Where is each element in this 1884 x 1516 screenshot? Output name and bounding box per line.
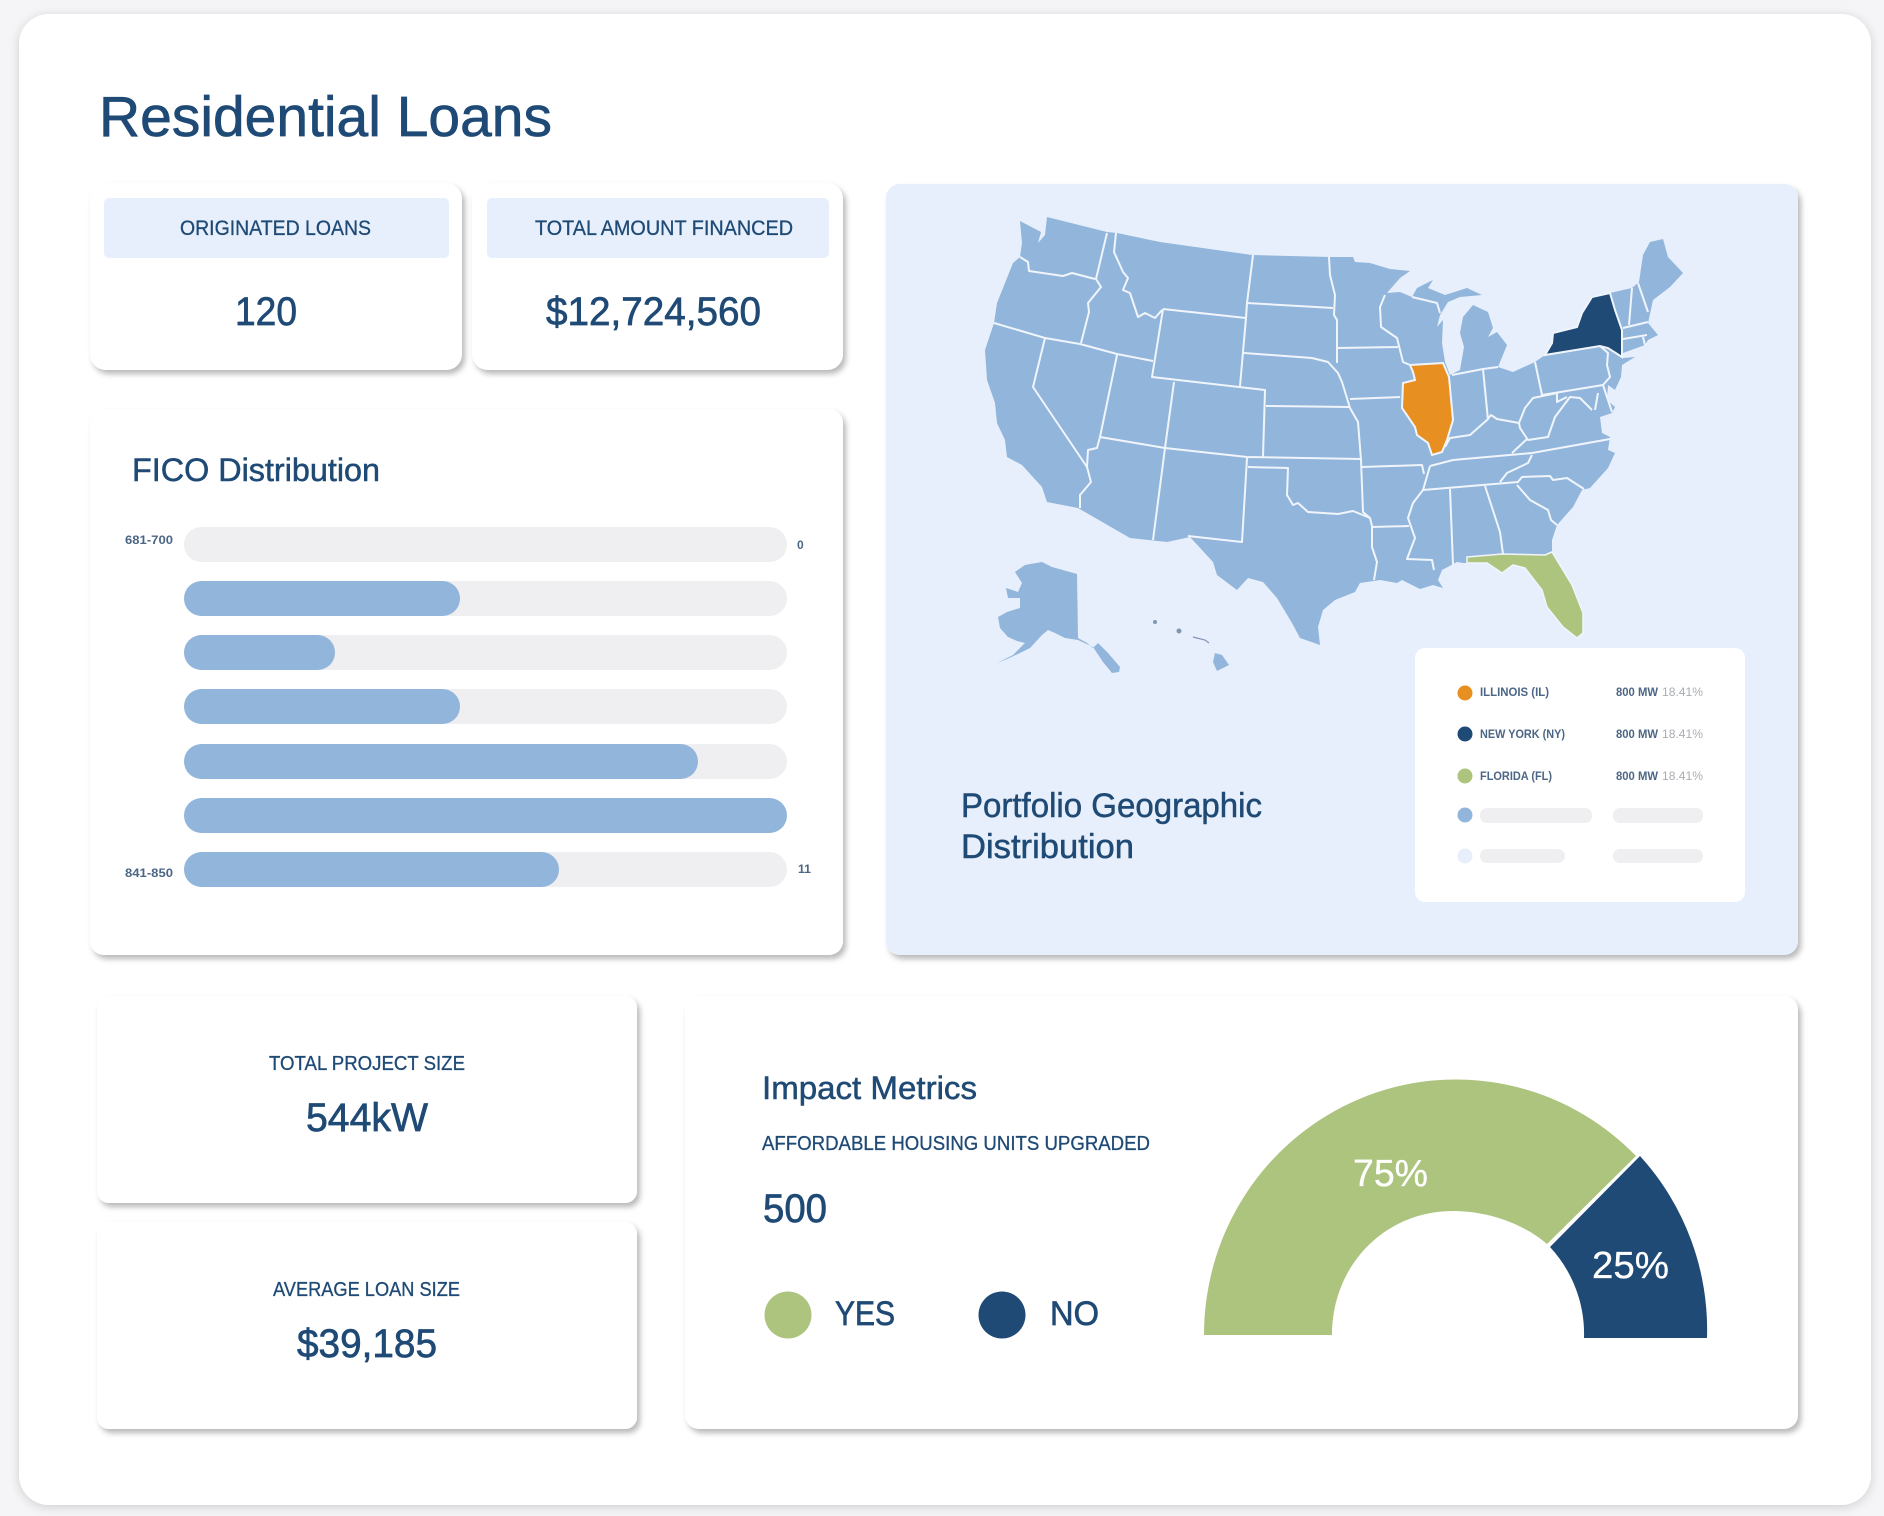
bar chart: 11 (798, 862, 811, 876)
panel: FICO distribution (90, 409, 843, 955)
map legend: 800 MW (1616, 685, 1659, 699)
state: Alaska (997, 562, 1120, 673)
map legend: NEW YORK (NY) (1480, 727, 1565, 741)
heading: portfolio geographic distribution: Distribution (961, 828, 1134, 866)
map legend: FLORIDA (FL) (1480, 769, 1552, 783)
map legend (1415, 648, 1745, 902)
bar chart: 841-850 (125, 866, 173, 880)
panel: average loan size (97, 1222, 637, 1429)
bar chart (125, 527, 811, 887)
heading: portfolio geographic distribution: Portfolio Geographic (961, 787, 1262, 825)
map of the United States (985, 217, 1683, 673)
panel: total project size (97, 996, 637, 1203)
label: affordable housing units upgraded: AFFORDABLE HOUSING UNITS UPGRADED (762, 1133, 1150, 1155)
label: total project size: TOTAL PROJECT SIZE (269, 1053, 465, 1075)
legend: yes (764, 1292, 895, 1338)
map legend: 18.41% (1662, 769, 1703, 783)
state: Florida (1467, 552, 1583, 638)
gauge chart: 75% (1353, 1153, 1428, 1195)
panel: total amount financed (472, 183, 843, 370)
legend: no: NO (1050, 1295, 1099, 1333)
label: total amount financed: TOTAL AMOUNT FINANCED (535, 217, 793, 240)
label: originated loans: ORIGINATED LOANS (180, 217, 371, 240)
map legend: ILLINOIS (IL) (1480, 685, 1549, 699)
gauge chart (1204, 1079, 1707, 1338)
bar chart: 0 (797, 538, 804, 552)
map legend: 18.41% (1662, 727, 1703, 741)
value: total amount financed: $12,724,560 (546, 290, 761, 334)
panel: originated loans (90, 183, 462, 370)
value: originated loans: 120 (235, 290, 297, 334)
panel: portfolio geographic distribution (886, 184, 1798, 955)
panel: impact metrics (685, 996, 1798, 1429)
value: affordable housing units: 500 (763, 1187, 827, 1231)
state: Illinois (1402, 363, 1453, 455)
title: Residential Loans (99, 85, 552, 149)
gauge chart: 25% (1592, 1245, 1669, 1287)
heading: FICO distribution: FICO Distribution (132, 452, 380, 488)
legend: yes: YES (835, 1295, 895, 1333)
value: average loan size: $39,185 (297, 1322, 437, 1366)
map legend: 800 MW (1616, 727, 1659, 741)
map legend: 800 MW (1616, 769, 1659, 783)
label: average loan size: AVERAGE LOAN SIZE (273, 1279, 460, 1301)
heading: impact metrics: Impact Metrics (762, 1070, 977, 1106)
state: New York (1545, 293, 1622, 357)
legend: no (978, 1292, 1099, 1338)
state: Hawaii (1153, 620, 1229, 671)
map legend: 18.41% (1662, 685, 1703, 699)
bar chart: 681-700 (125, 533, 173, 547)
value: total project size: 544kW (306, 1096, 428, 1140)
